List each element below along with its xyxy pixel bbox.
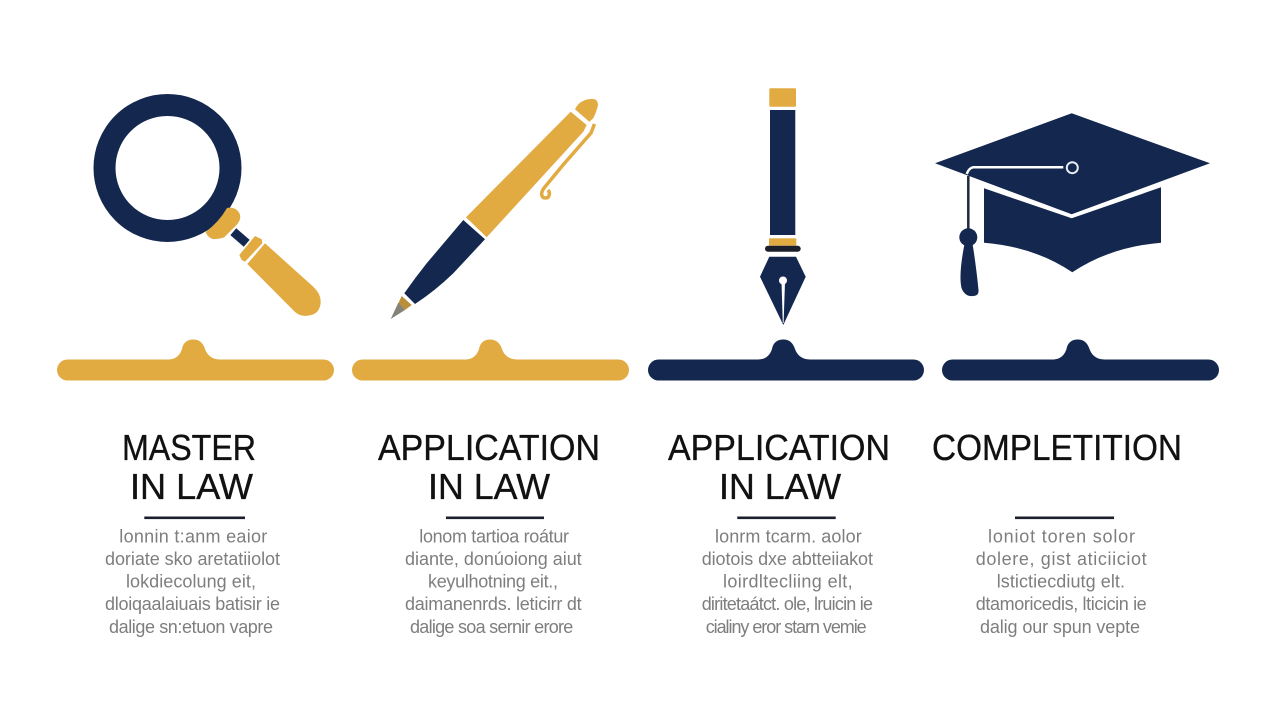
text block 3: cialiny eror starn vemie	[706, 617, 867, 637]
panel: master in law	[57, 105, 334, 637]
divider 4	[1015, 516, 1114, 519]
heading 2: IN LAW	[428, 466, 551, 507]
text block 2: dalige soa sernir erore	[410, 617, 573, 637]
text block 2: keyulhotning eit.,	[428, 572, 558, 592]
timeline bar 4	[942, 340, 1219, 380]
text block 4: loniot toren solor	[988, 527, 1135, 547]
text block 3: diritetaátct. ole, lruicin ie	[702, 594, 873, 614]
divider 3	[737, 516, 836, 519]
icon: magnifying glass	[104, 105, 321, 316]
text block 2: lonom tartioa roátur	[419, 527, 569, 547]
text block 4: dtamoricedis, lticicin ie	[976, 594, 1147, 614]
text block 4: dolere, gist aticiiciot	[976, 549, 1147, 569]
heading 3: IN LAW	[719, 466, 842, 507]
text block 3: lonrm tcarm. aolor	[715, 527, 862, 547]
text block 1	[105, 527, 280, 637]
heading 1: IN LAW	[130, 466, 254, 507]
heading 2	[378, 427, 600, 507]
text block 4: dalig our spun vepte	[980, 617, 1140, 637]
text block 3: loirdltecliing elt,	[723, 572, 853, 592]
heading 2: APPLICATION	[378, 427, 600, 468]
timeline bar 1	[57, 340, 334, 380]
icon: pen	[391, 99, 598, 319]
text block 2: diante, donúoiong aiut	[405, 549, 582, 569]
text block 3	[702, 527, 873, 637]
text block 1: doriate sko aretatiiolot	[105, 549, 280, 569]
icon: graduation cap	[935, 113, 1210, 296]
text block 4: lstictiecdiutg elt.	[997, 572, 1125, 592]
panel: completition	[932, 113, 1219, 637]
timeline bar 3	[648, 340, 924, 380]
panel: application in law (fountain pen)	[648, 88, 924, 637]
timeline bar 2	[352, 340, 629, 380]
text block 2: daimanenrds. leticirr dt	[405, 594, 582, 614]
divider 2	[446, 516, 544, 519]
heading 1: MASTER	[122, 427, 256, 468]
text block 2	[405, 527, 582, 637]
text block 1: dalige sn:etuon vapre	[109, 617, 273, 637]
icon: fountain pen	[760, 88, 806, 325]
panel: application in law (pen)	[352, 99, 629, 637]
divider 1	[144, 516, 245, 519]
text block 1: lonnin t:anm eaior	[119, 527, 267, 547]
text block 1: lokdiecolung eit,	[126, 572, 256, 592]
text block 1: dloiqaalaiuais batisir ie	[105, 594, 280, 614]
heading 3	[668, 427, 890, 507]
heading 1	[122, 427, 256, 507]
text block 3: diotois dxe abtteiiakot	[702, 549, 873, 569]
text block 4	[976, 527, 1147, 637]
heading 3: APPLICATION	[668, 427, 890, 468]
heading 4: COMPLETITION	[932, 427, 1182, 468]
